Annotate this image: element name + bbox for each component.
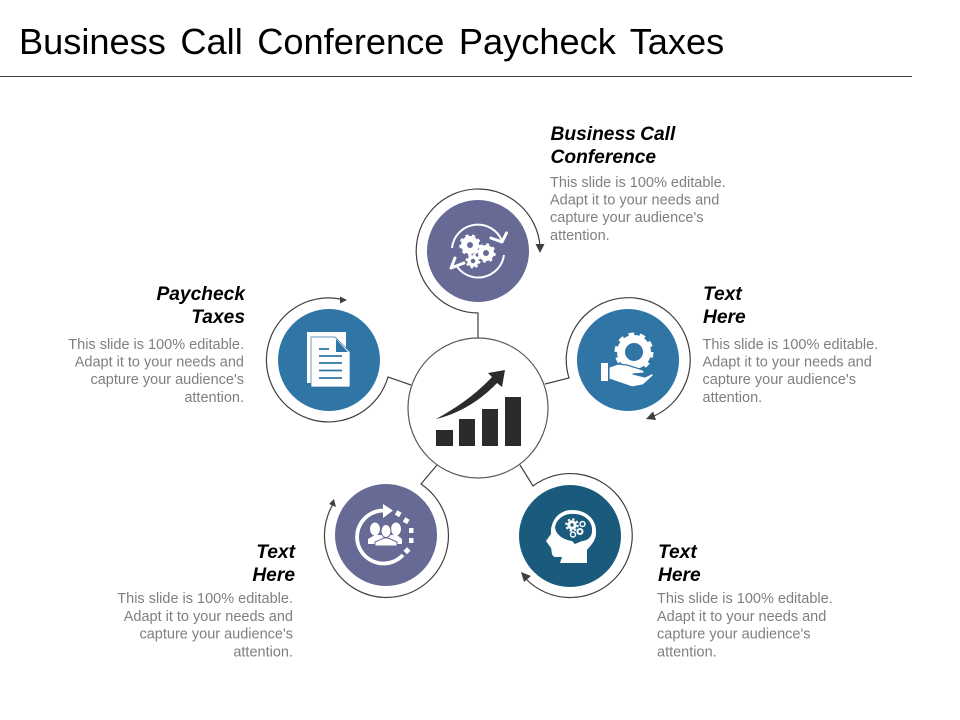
icon: rising bars and arrow [436,370,521,446]
text block: business call conference: Business Call [550,124,676,145]
text block: text here bottom right: Here [658,565,701,586]
text block: text here right: Text [703,284,743,305]
text block: text here bottom left: Here [252,565,295,586]
panel: text here bottom right node [519,465,632,598]
icon: head with gears [546,510,596,563]
text block: text here bottom right: Adapt it to your needs and [657,609,826,625]
text block: text here bottom right: This slide is 100% editable. [657,591,833,607]
panel: text here bottom left node [324,465,448,598]
center hub with growth chart [408,338,548,478]
text block: text here bottom left: attention. [233,644,293,660]
icon: hand holding gear [601,334,653,387]
text block: text here bottom left [117,542,297,660]
text block: business call conference: Adapt it to your needs and [550,192,719,208]
text block: text here right: Here [703,307,746,328]
text block: business call conference: This slide is 100% editable. [550,175,726,191]
text block: text here right: This slide is 100% editable. [702,337,878,353]
text block: business call conference: attention. [550,228,610,244]
icon: documents [307,332,350,387]
text block: business call conference: Conference [550,147,656,168]
text block: paycheck taxes: attention. [184,390,244,406]
text block: text here bottom left: Text [256,542,297,563]
text block: paycheck taxes [68,284,246,406]
icon: gears with refresh arrows [451,225,506,278]
text block: paycheck taxes: This slide is 100% editable. [68,337,244,353]
text block: paycheck taxes: Paycheck [156,284,246,305]
panel: paycheck taxes node [266,296,411,422]
text block: text here right: attention. [702,390,762,406]
title: Business Call Conference Paycheck Taxes [19,21,724,62]
text block: text here bottom right [657,542,833,660]
panel: business call conference node [416,189,544,338]
text block: text here bottom right: capture your audience's [657,626,811,642]
text block: business call conference [550,124,726,244]
panel: text here right node [545,298,690,420]
text block: text here bottom left: capture your audience's [139,626,293,642]
text block: paycheck taxes: Adapt it to your needs and [75,354,244,370]
text block: text here bottom left: This slide is 100% editable. [117,591,293,607]
text block: text here right [702,284,878,406]
text block: text here right: capture your audience's [702,372,856,388]
text block: text here bottom right: attention. [657,644,717,660]
text block: paycheck taxes: capture your audience's [90,372,244,388]
text block: text here right: Adapt it to your needs and [702,354,872,370]
text block: business call conference: capture your audience's [550,210,704,226]
text block: text here bottom left: Adapt it to your needs and [124,609,293,625]
text block: paycheck taxes: Taxes [191,307,245,328]
text block: text here bottom right: Text [658,542,698,563]
icon: team with circular arrow [357,504,414,563]
